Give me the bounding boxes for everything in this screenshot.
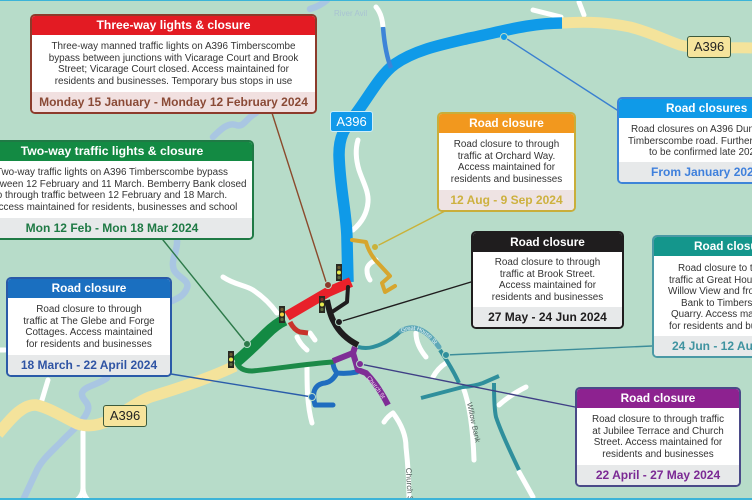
text block — [23, 304, 155, 350]
text block: bypass between junctions with Vicarage Court and Brook — [49, 53, 298, 64]
river — [23, 0, 327, 500]
river label: River Avil — [334, 9, 367, 18]
panel: Orchard Way closure — [437, 112, 576, 212]
bottom edge line — [0, 498, 752, 500]
closed road: teal — [358, 331, 519, 470]
closed road: green — [236, 320, 285, 362]
road name: Church St: Church St — [368, 376, 385, 399]
text block: Street. Access maintained for — [594, 437, 722, 448]
blue branch — [383, 27, 391, 68]
leader lines — [163, 37, 652, 407]
text block: Road closure to through — [36, 304, 142, 315]
text block — [49, 41, 298, 87]
road label: A396 west: A396 — [110, 408, 140, 423]
text block — [668, 263, 752, 332]
road label: A396 east: A396 — [694, 39, 724, 54]
heading: Road closures — [666, 101, 747, 115]
text block: at Jubilee Terrace and Church — [592, 426, 724, 437]
closed road: red branch — [290, 322, 308, 333]
text block: Road closure to through — [454, 139, 559, 150]
closed road: dark blue — [314, 362, 357, 405]
text block — [0, 167, 247, 213]
date — [619, 162, 752, 182]
text block: residents and businesses. Temporary bus stops in use — [55, 76, 292, 87]
date: 12 Aug - 9 Sep 2024 — [450, 193, 563, 207]
date: 22 April - 27 May 2024 — [596, 468, 720, 482]
date — [439, 190, 574, 210]
text block: for residents and businesses — [26, 339, 152, 350]
date: Monday 15 January - Monday 12 February 2024 — [39, 95, 308, 109]
text block: to through traffic between 12 February and 18 March. — [0, 190, 227, 201]
text block: Access maintained for — [458, 162, 555, 173]
closed road: red — [287, 282, 351, 316]
icon: traffic light 1 — [228, 351, 234, 368]
text block: Two-way traffic lights on A396 Timberscombe bypass — [0, 167, 228, 178]
text block: Street; Vicarage Court closed. Access maintained for — [58, 64, 289, 75]
text block: Cottages. Access maintained — [25, 327, 153, 338]
date — [8, 355, 170, 375]
road label: A396 blue: A396 — [336, 114, 367, 129]
text block: Access maintained for — [499, 280, 596, 291]
heading — [439, 112, 574, 133]
date: 27 May - 24 Jun 2024 — [488, 310, 607, 324]
heading: Two-way traffic lights & closure — [21, 144, 203, 158]
panel: The Glebe closure — [6, 277, 172, 377]
closed road: blue A396 — [339, 23, 562, 282]
closed road: orange — [352, 240, 395, 292]
panel: Brook Street closure — [471, 231, 624, 329]
road label: A396 west — [103, 405, 147, 427]
heading — [0, 140, 252, 161]
icon: traffic light 2 — [279, 306, 285, 323]
heading — [654, 235, 752, 256]
date — [577, 465, 739, 485]
icon: traffic light 3 — [319, 296, 325, 313]
icon: traffic light 4 — [336, 264, 342, 281]
date: 18 March - 22 April 2024 — [21, 358, 157, 372]
text block: traffic at Brook Street. — [500, 269, 595, 280]
heading — [8, 277, 170, 298]
A396 yellow road east — [562, 22, 752, 48]
heading: Road closure — [469, 116, 544, 130]
text block — [492, 257, 603, 303]
date: Mon 12 Feb - Mon 18 Mar 2024 — [26, 221, 198, 235]
text block: Road closure to through traffic — [592, 414, 724, 425]
road label: A396 east — [687, 36, 731, 58]
text block: residents and businesses — [602, 449, 714, 460]
heading — [577, 387, 739, 408]
A396 yellow road west — [0, 366, 235, 434]
road name: Willow Bank: Willow Bank — [465, 402, 482, 444]
date — [473, 307, 622, 327]
panel: three-way lights — [30, 14, 317, 114]
date — [0, 218, 252, 238]
text block — [628, 124, 752, 158]
heading: Three-way lights & closure — [97, 18, 250, 32]
panel: Dunster road closures — [617, 97, 752, 184]
top edge line — [0, 0, 752, 1]
text block — [451, 139, 562, 185]
text block: Three-way manned traffic lights on A396 Timberscombe — [51, 41, 296, 52]
panel: Jubilee Terrace closure — [575, 387, 741, 487]
minor white roads — [0, 2, 584, 500]
leader dots — [244, 34, 508, 400]
heading: Road closure — [52, 281, 126, 295]
text block: traffic at The Glebe and Forge — [23, 316, 155, 327]
road name: Great House St: Great House St — [401, 326, 438, 344]
heading — [32, 14, 315, 35]
text block: Road closure to through — [495, 257, 600, 268]
date — [32, 92, 315, 112]
closed road: black — [327, 300, 358, 345]
panel: two-way lights — [0, 140, 254, 240]
text block: residents and businesses — [451, 174, 562, 185]
text block: traffic at Orchard Way. — [458, 151, 555, 162]
heading — [619, 97, 752, 118]
closed road: green thin — [237, 362, 332, 371]
heading — [473, 231, 622, 252]
road label: A396 blue — [330, 111, 373, 132]
closed road: purple — [333, 347, 388, 405]
heading: Road closure — [510, 235, 585, 249]
text block — [592, 414, 724, 460]
text block: residents and businesses — [492, 292, 603, 303]
date — [654, 336, 752, 356]
heading: Road closure — [621, 391, 695, 405]
panel: Great House Street closure — [652, 235, 752, 358]
